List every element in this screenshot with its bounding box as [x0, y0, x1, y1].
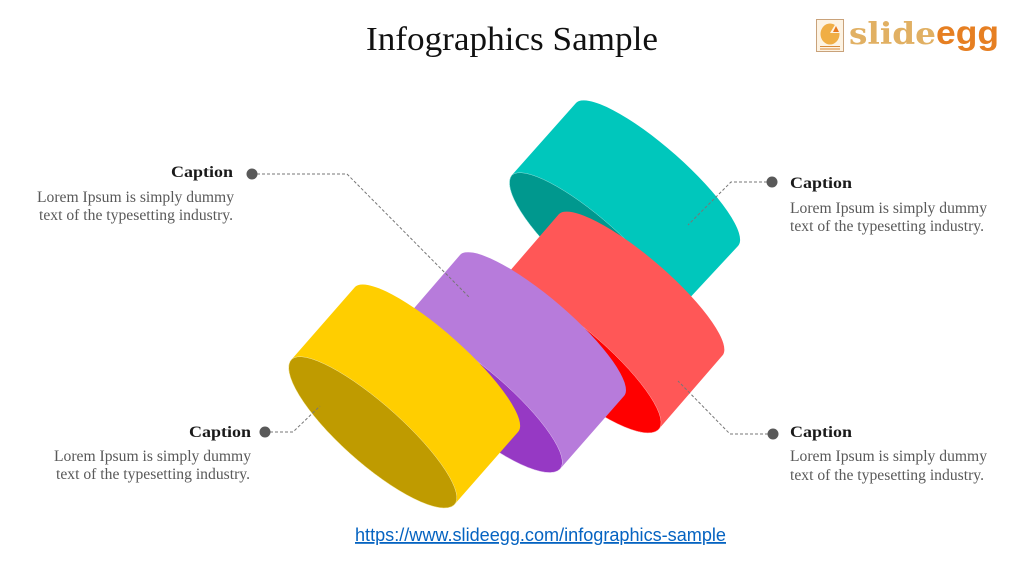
callout: bottom left: Lorem Ipsum is simply dummy	[54, 448, 251, 465]
callout: bottom right	[678, 381, 987, 484]
logo: slideegg: egg	[936, 14, 999, 51]
cylinder: red	[493, 212, 724, 433]
callout: bottom left: text of the typesetting industry.	[56, 466, 250, 483]
callout: top right	[688, 175, 987, 235]
callout: top left	[37, 164, 469, 297]
source link: https://www.slideegg.com/infographics-sample	[355, 525, 726, 545]
title: Infographics Sample	[366, 21, 658, 58]
cylinder: yellow	[289, 284, 520, 508]
cylinder: teal	[510, 100, 740, 320]
logo: slideegg	[816, 14, 999, 52]
callout: top right: Caption	[790, 175, 852, 192]
callout: bottom left	[54, 406, 320, 483]
callout: bottom right: Caption	[790, 424, 852, 441]
callout: top right: text of the typesetting industry.	[790, 218, 984, 235]
callout: top right: Lorem Ipsum is simply dummy	[790, 200, 987, 217]
cylinder: purple	[394, 252, 626, 473]
callout: bottom left: Caption	[189, 424, 251, 441]
callout: top left: Lorem Ipsum is simply dummy	[37, 189, 234, 206]
callout: top left: text of the typesetting industry.	[39, 207, 233, 224]
callout: top left: Caption	[171, 164, 233, 181]
callout: bottom right: Lorem Ipsum is simply dummy	[790, 448, 987, 465]
callout: bottom right: text of the typesetting industry.	[790, 467, 984, 484]
logo: slideegg: slide	[849, 17, 936, 52]
